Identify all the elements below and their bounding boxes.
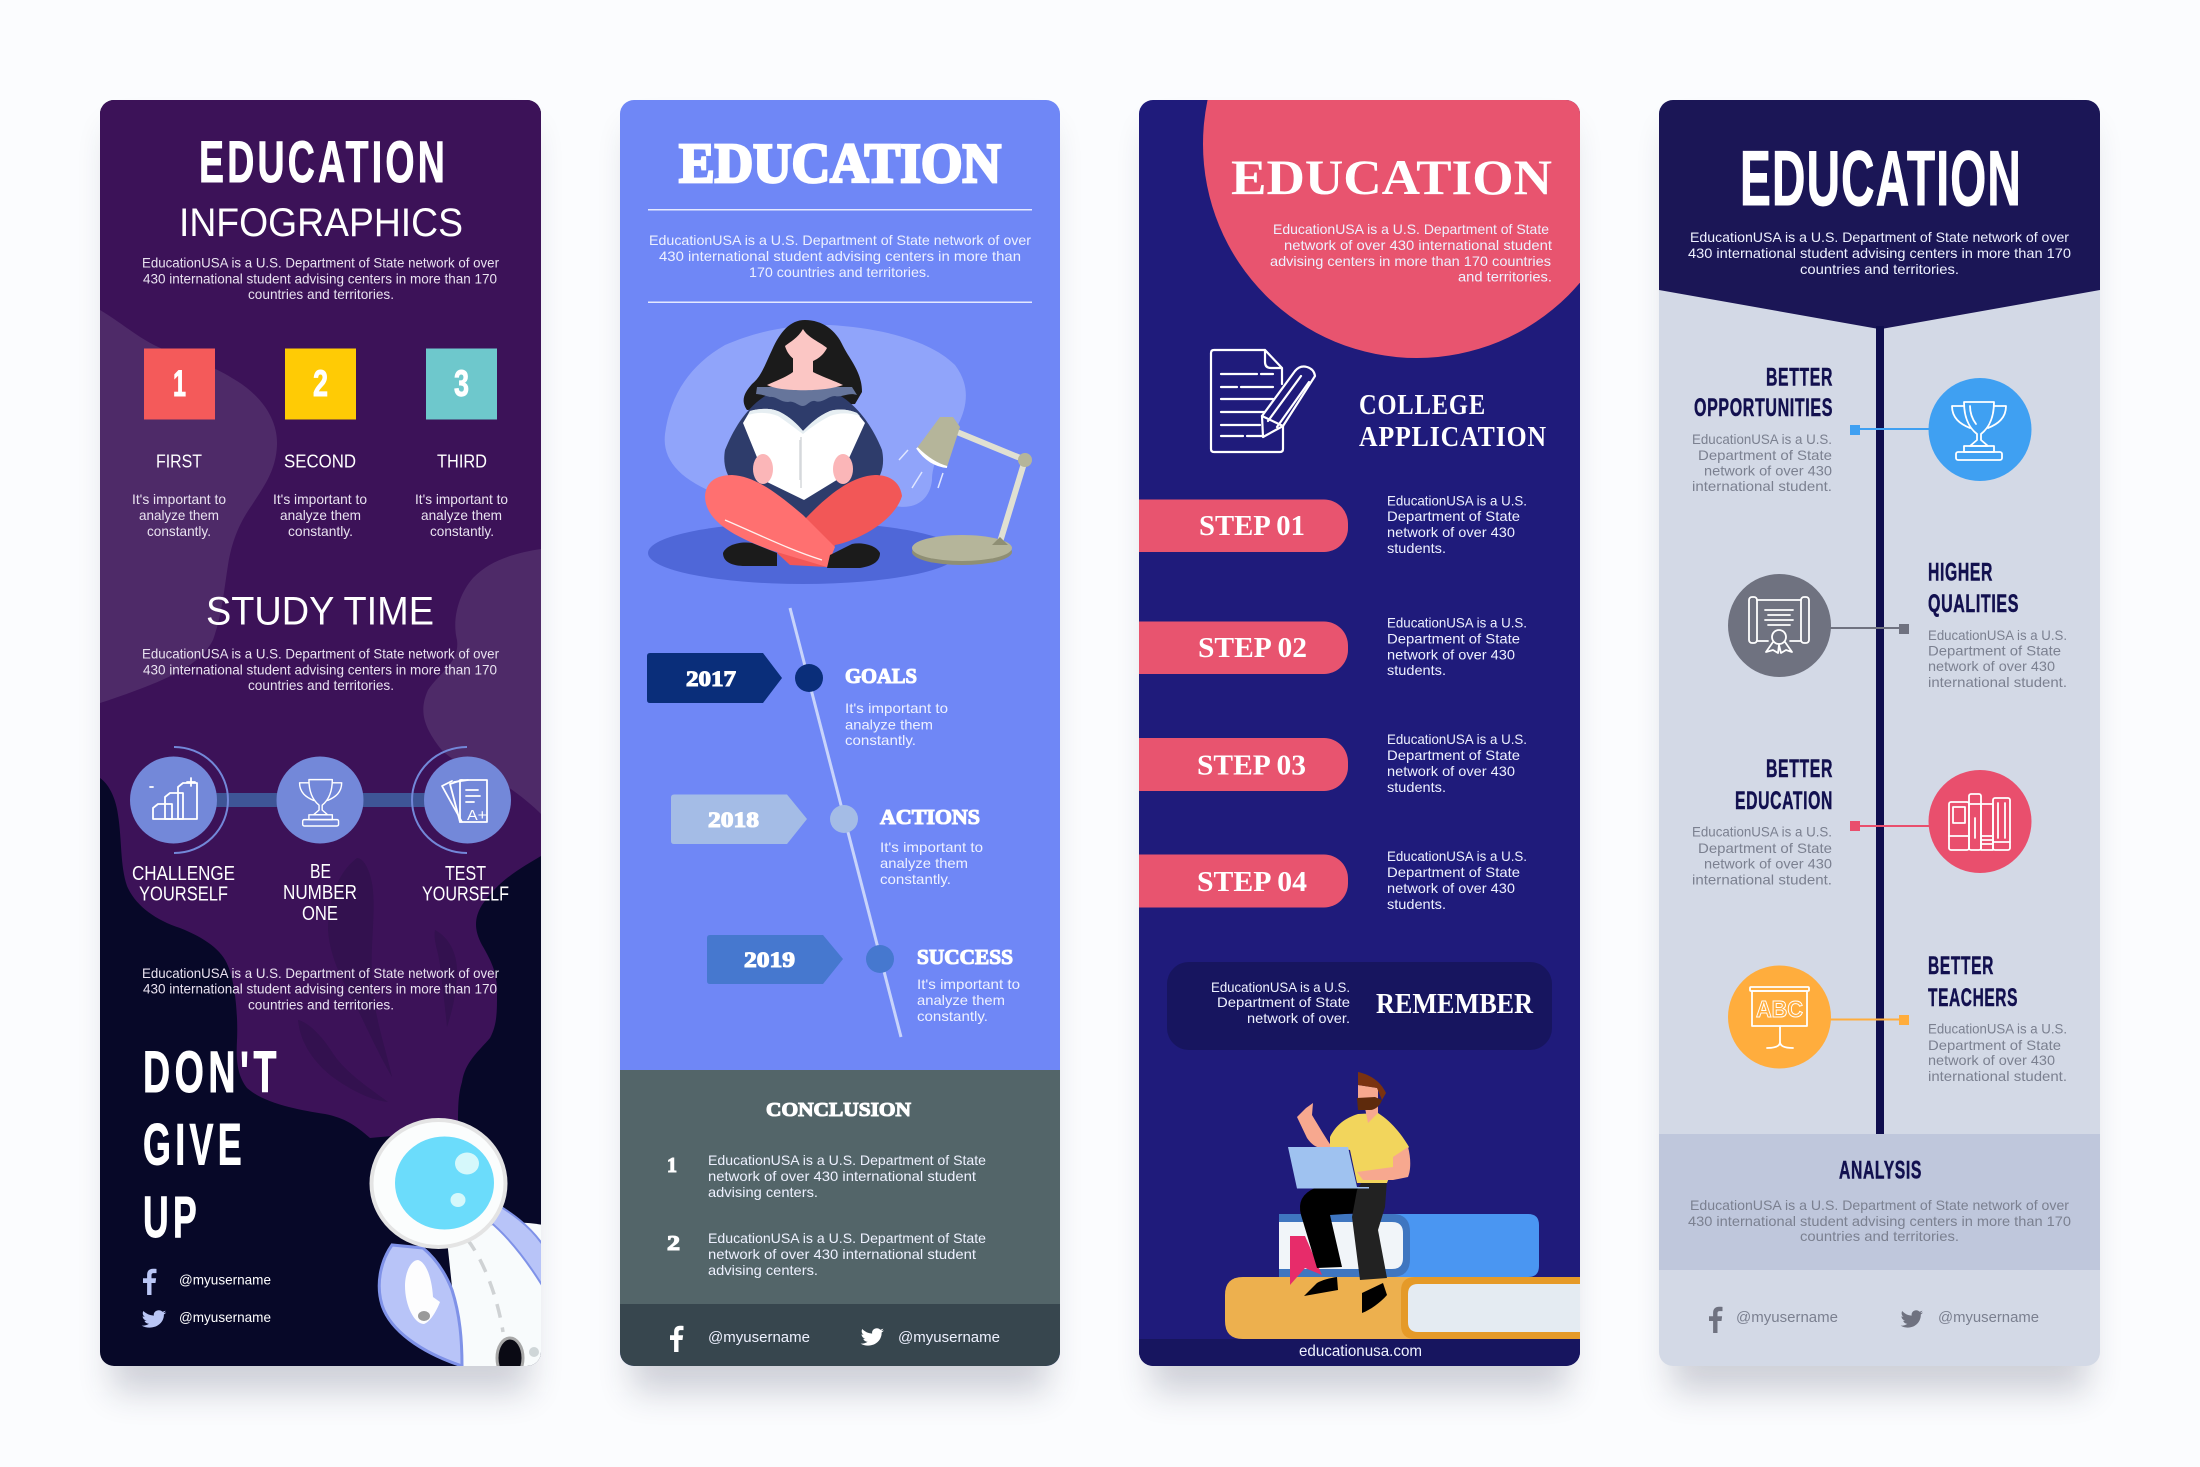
milestone 2019: 2019 [744, 947, 795, 972]
callout: remember: REMEMBER [1376, 988, 1534, 1020]
closing text: countries and territories. [248, 996, 394, 1012]
intro text with rules: 170 countries and territories. [749, 264, 930, 280]
blue book [1393, 1214, 1539, 1277]
intro text [142, 254, 499, 302]
callout: remember [1167, 962, 1552, 1050]
step 01: network of over 430 [1387, 524, 1515, 540]
floor shadow [648, 522, 958, 584]
step 1 [132, 348, 226, 539]
illustration: woman reading [648, 320, 966, 584]
study time text: 430 international student advising centers in more than 170 [143, 662, 497, 678]
step 01 [1199, 492, 1527, 556]
milestone 2017: 2017 [686, 666, 736, 691]
milestone 2019: constantly. [917, 1008, 988, 1024]
facebook handle: @myusername [708, 1329, 810, 1346]
conclusion item 1: advising centers. [708, 1184, 818, 1200]
slogan: don't give up: GIVE [143, 1112, 246, 1178]
illustration: man with laptop [1288, 1072, 1410, 1313]
icon: test papers [424, 756, 511, 844]
item: better opportunities [1692, 364, 1833, 494]
connector: orange [1829, 1015, 1909, 1025]
milestone 2018: ACTIONS [880, 805, 980, 829]
milestone 2018 [671, 794, 983, 887]
step 03: EducationUSA is a U.S. [1387, 731, 1527, 747]
step 1: It's important to [132, 491, 226, 507]
central line [1876, 326, 1884, 1134]
light rays [899, 450, 943, 488]
twitter handle: @myusername [179, 1309, 271, 1325]
item: better education: international student. [1692, 872, 1832, 888]
shoes [1304, 1277, 1338, 1296]
step 02: EducationUSA is a U.S. [1387, 614, 1527, 630]
intro text: EducationUSA is a U.S. Department of State network of over [142, 254, 499, 270]
step 01: students. [1387, 540, 1446, 556]
astronaut helmet [372, 1120, 506, 1247]
book [743, 409, 865, 500]
feet [723, 542, 777, 566]
label: be number one [283, 861, 357, 925]
milestone 2019 [707, 935, 1020, 1024]
item: better teachers: Department of State [1928, 1037, 2061, 1053]
step 02 [1198, 614, 1527, 678]
milestone 2017 [647, 653, 948, 748]
connector bar [215, 793, 426, 807]
milestone 2019: analyze them [917, 992, 1005, 1008]
intro text: EducationUSA is a U.S. Department of State [1273, 221, 1549, 237]
intro text [1688, 229, 2071, 277]
milestone 2017: constantly. [845, 732, 916, 748]
astronaut seam dashed [467, 1239, 503, 1332]
item: higher qualities: international student. [1928, 674, 2067, 690]
arc left [174, 747, 228, 853]
astronaut arm [379, 1245, 462, 1366]
item: better teachers: TEACHERS [1928, 984, 2018, 1012]
front leg [1300, 1187, 1363, 1268]
label: be number one: NUMBER [283, 882, 357, 904]
intro text: 430 international student advising centers in more than 170 [143, 270, 497, 286]
icon: diploma [1728, 574, 1831, 677]
step 3: It's important to [415, 491, 508, 507]
callout: remember: Department of State [1217, 994, 1350, 1010]
item: better opportunities: Department of State [1698, 447, 1832, 463]
neck and chest [767, 355, 843, 390]
heading: college application: APPLICATION [1359, 421, 1547, 453]
step 01: Department of State [1387, 508, 1520, 524]
step 2: It's important to [273, 491, 367, 507]
closing text [142, 965, 499, 1012]
connector: pink [1850, 821, 1930, 831]
slogan: don't give up: DON'T [143, 1040, 281, 1105]
forearm [1357, 1147, 1410, 1180]
step 02: Department of State [1387, 630, 1520, 646]
label: be number one: ONE [302, 903, 338, 925]
hands [753, 454, 773, 484]
step pills [1139, 500, 1348, 908]
item: better education: EducationUSA is a U.S. [1692, 824, 1832, 840]
heading: conclusion: CONCLUSION [766, 1099, 912, 1121]
step 3: THIRD [437, 452, 487, 472]
milestone 2019: SUCCESS [917, 945, 1013, 969]
heading: study time: STUDY TIME [206, 590, 434, 634]
beard [1357, 1097, 1382, 1110]
heading: analysis: ANALYSIS [1839, 1156, 1922, 1184]
lamp base [912, 539, 1012, 565]
milestone 2019: It's important to [917, 976, 1020, 992]
analysis band [1659, 1134, 2100, 1270]
twitter handle: @myusername [1938, 1309, 2039, 1326]
torso [724, 385, 883, 519]
icon: facebook [1709, 1307, 1722, 1333]
item: better teachers: BETTER [1928, 952, 1994, 980]
label: challenge yourself [132, 863, 235, 906]
intro text: 430 international student advising centers in more than 170 [1688, 245, 2071, 261]
lamp shade [917, 417, 960, 467]
illustration: stacked books [1225, 1214, 1580, 1339]
icon: document and pencil [1211, 350, 1315, 452]
milestone 2018: It's important to [880, 839, 983, 855]
illustration: desk lamp [899, 417, 1032, 565]
milestone 2017: analyze them [845, 716, 933, 732]
conclusion item 2: advising centers. [708, 1262, 818, 1278]
step 04: EducationUSA is a U.S. [1387, 848, 1527, 864]
slogan: don't give up: UP [143, 1185, 201, 1250]
icon: twitter [1901, 1310, 1923, 1328]
item: better education [1692, 755, 1833, 888]
panel: navy college application [1136, 100, 1582, 1406]
pink header circle [1203, 100, 1580, 358]
conclusion item 2: network of over 430 international student [708, 1246, 976, 1262]
item: better education: EDUCATION [1735, 787, 1833, 815]
item: better opportunities: EducationUSA is a U.S. [1692, 431, 1832, 447]
face [785, 329, 827, 363]
item: better teachers: network of over 430 [1928, 1052, 2055, 1068]
conclusion item 2 [667, 1230, 986, 1278]
intro text with rules: 430 international student advising centers in more than [659, 248, 1021, 264]
slogan: don't give up [143, 1040, 281, 1250]
header shape [1659, 100, 2100, 328]
analysis text: 430 international student advising centers in more than 170 [1688, 1213, 2071, 1229]
hair [744, 320, 862, 410]
conclusion item 2: 2 [667, 1231, 680, 1255]
astronaut body [448, 1222, 541, 1366]
panel: blue timeline [620, 100, 1060, 1392]
conclusion item 1: 1 [667, 1153, 677, 1177]
step 3: constantly. [430, 523, 494, 539]
connector: blue [1850, 425, 1930, 435]
step 02: students. [1387, 662, 1446, 678]
study time text: EducationUSA is a U.S. Department of State network of over [142, 646, 499, 662]
collar frill [756, 387, 857, 406]
icon: abc board [1728, 966, 1831, 1068]
item: higher qualities: Department of State [1928, 642, 2061, 658]
intro text: advising centers in more than 170 countries [1270, 253, 1551, 269]
head [1358, 1085, 1378, 1123]
step 1: analyze them [139, 507, 219, 523]
conclusion item 2: EducationUSA is a U.S. Department of State [708, 1230, 986, 1246]
conclusion band [620, 1070, 1060, 1304]
shirt [1330, 1113, 1409, 1183]
connector: grey [1829, 624, 1909, 634]
astronaut arm highlight [405, 1260, 440, 1324]
facebook handle: @myusername [1736, 1309, 1838, 1326]
astronaut visor [395, 1136, 494, 1230]
social footer band [620, 1304, 1060, 1366]
step 03: Department of State [1387, 747, 1520, 763]
study time text [142, 646, 499, 693]
hair [1358, 1072, 1386, 1100]
item: higher qualities [1928, 558, 2067, 690]
title: EDUCATION [679, 133, 1001, 195]
milestone 2017: GOALS [845, 664, 917, 688]
lamp arms [957, 432, 1025, 542]
closing text: 430 international student advising centers in more than 170 [143, 980, 497, 996]
item: better teachers [1928, 952, 2067, 1084]
intro text [1270, 221, 1552, 284]
step 3: analyze them [421, 507, 502, 523]
label: challenge yourself: CHALLENGE [132, 863, 235, 885]
step 2: analyze them [280, 507, 361, 523]
icon: challenge stairs [130, 756, 217, 844]
step 01: STEP 01 [1199, 510, 1305, 542]
study time text: countries and territories. [248, 677, 394, 693]
panel: purple education infographics [100, 100, 560, 1392]
item: higher qualities: network of over 430 [1928, 658, 2055, 674]
intro text: countries and territories. [1800, 261, 1959, 277]
label: be number one: BE [310, 861, 331, 883]
intro text with rules [648, 209, 1032, 303]
panel: grey vertical timeline [1659, 100, 2100, 1392]
back leg [1352, 1180, 1387, 1280]
item: better education: network of over 430 [1704, 856, 1832, 872]
timeline line [790, 608, 901, 1037]
callout: remember: network of over. [1247, 1010, 1350, 1026]
label: test yourself: YOURSELF [422, 884, 509, 906]
background blob [665, 325, 966, 507]
facebook handle: @myusername [179, 1272, 271, 1288]
item: better teachers: international student. [1928, 1068, 2067, 1084]
step 01: EducationUSA is a U.S. [1387, 492, 1527, 508]
step 1: 1 [173, 363, 186, 404]
analysis text: EducationUSA is a U.S. Department of State network of over [1690, 1197, 2069, 1213]
laptop [1288, 1147, 1369, 1188]
astronaut shoulder band [492, 1207, 541, 1286]
intro text: EducationUSA is a U.S. Department of State network of over [1690, 229, 2069, 245]
step 3 [415, 348, 508, 539]
step 04: STEP 04 [1197, 866, 1307, 898]
twitter handle: @myusername [898, 1329, 1000, 1346]
left leg [705, 475, 835, 567]
heading: college application: COLLEGE [1359, 389, 1486, 421]
step 03: network of over 430 [1387, 763, 1515, 779]
icon: facebook [143, 1269, 156, 1295]
icon: twitter [142, 1310, 166, 1328]
step 02: STEP 02 [1198, 632, 1307, 664]
icon: twitter [861, 1328, 884, 1346]
raised arm [1297, 1103, 1332, 1148]
icon: facebook [670, 1326, 684, 1352]
nebula flame streaks [298, 858, 457, 1102]
item: better opportunities: OPPORTUNITIES [1694, 394, 1833, 422]
intro text with rules: EducationUSA is a U.S. Department of State network of over [649, 232, 1031, 248]
footer band [1139, 1339, 1580, 1366]
step 3: 3 [454, 363, 469, 404]
step 1: constantly. [147, 523, 211, 539]
bookmark [1290, 1236, 1322, 1285]
item: better education: Department of State [1698, 840, 1832, 856]
closing text: EducationUSA is a U.S. Department of State network of over [142, 965, 499, 981]
milestone 2018: 2018 [708, 807, 759, 832]
right leg [777, 475, 902, 567]
analysis text: countries and territories. [1800, 1228, 1959, 1244]
heading: college application [1359, 389, 1547, 453]
orange book [1225, 1277, 1414, 1339]
item: better opportunities: international student. [1692, 478, 1832, 494]
milestone 2018: analyze them [880, 855, 968, 871]
analysis text [1688, 1197, 2071, 1244]
icon: test papers: A+ [467, 807, 487, 824]
callout: remember: EducationUSA is a U.S. [1211, 979, 1350, 995]
step 2 [273, 348, 367, 539]
step 2: constantly. [288, 523, 353, 539]
intro text: and territories. [1458, 268, 1552, 284]
label: test yourself: TEST [445, 863, 486, 885]
step 04 [1197, 848, 1527, 912]
step 2: SECOND [284, 452, 356, 472]
icon: books [1928, 770, 2032, 873]
icon: trophy [1928, 378, 2032, 481]
conclusion item 1: EducationUSA is a U.S. Department of State [708, 1152, 986, 1168]
purple nebula background [100, 100, 541, 1138]
item: better teachers: EducationUSA is a U.S. [1928, 1020, 2067, 1036]
arc right [412, 747, 467, 853]
item: higher qualities: EducationUSA is a U.S. [1928, 627, 2067, 643]
astronaut [370, 1118, 541, 1366]
step 03 [1197, 731, 1527, 795]
label: challenge yourself: YOURSELF [139, 884, 228, 906]
title: EDUCATION [199, 130, 448, 195]
item: better opportunities: network of over 430 [1704, 462, 1832, 478]
icon: trophy [276, 756, 364, 844]
conclusion item 1: network of over 430 international student [708, 1168, 976, 1184]
item: better education: BETTER [1766, 755, 1833, 783]
astronaut port [496, 1336, 524, 1366]
title: EDUCATION [1231, 149, 1552, 205]
milestone 2017: It's important to [845, 700, 948, 716]
item: higher qualities: QUALITIES [1928, 590, 2019, 618]
step 03: STEP 03 [1197, 750, 1306, 782]
step 04: Department of State [1387, 864, 1520, 880]
icon: abc board: ABC [1756, 996, 1803, 1022]
step 03: students. [1387, 779, 1446, 795]
website link: educationusa.com [1299, 1343, 1422, 1360]
item: higher qualities: HIGHER [1928, 558, 1993, 586]
step 04: network of over 430 [1387, 880, 1515, 896]
nebula blob left [100, 310, 277, 703]
item: better opportunities: BETTER [1766, 364, 1833, 392]
nebula blob right [423, 549, 541, 814]
label: test yourself [422, 863, 509, 906]
step 04: students. [1387, 896, 1446, 912]
step 2: 2 [313, 363, 328, 404]
milestone 2018: constantly. [880, 871, 951, 887]
step 1: FIRST [156, 452, 202, 472]
conclusion item 1 [667, 1152, 986, 1200]
subtitle: INFOGRAPHICS [179, 201, 463, 245]
step 02: network of over 430 [1387, 646, 1515, 662]
intro text: countries and territories. [248, 286, 394, 302]
intro text: network of over 430 international student [1284, 237, 1552, 253]
